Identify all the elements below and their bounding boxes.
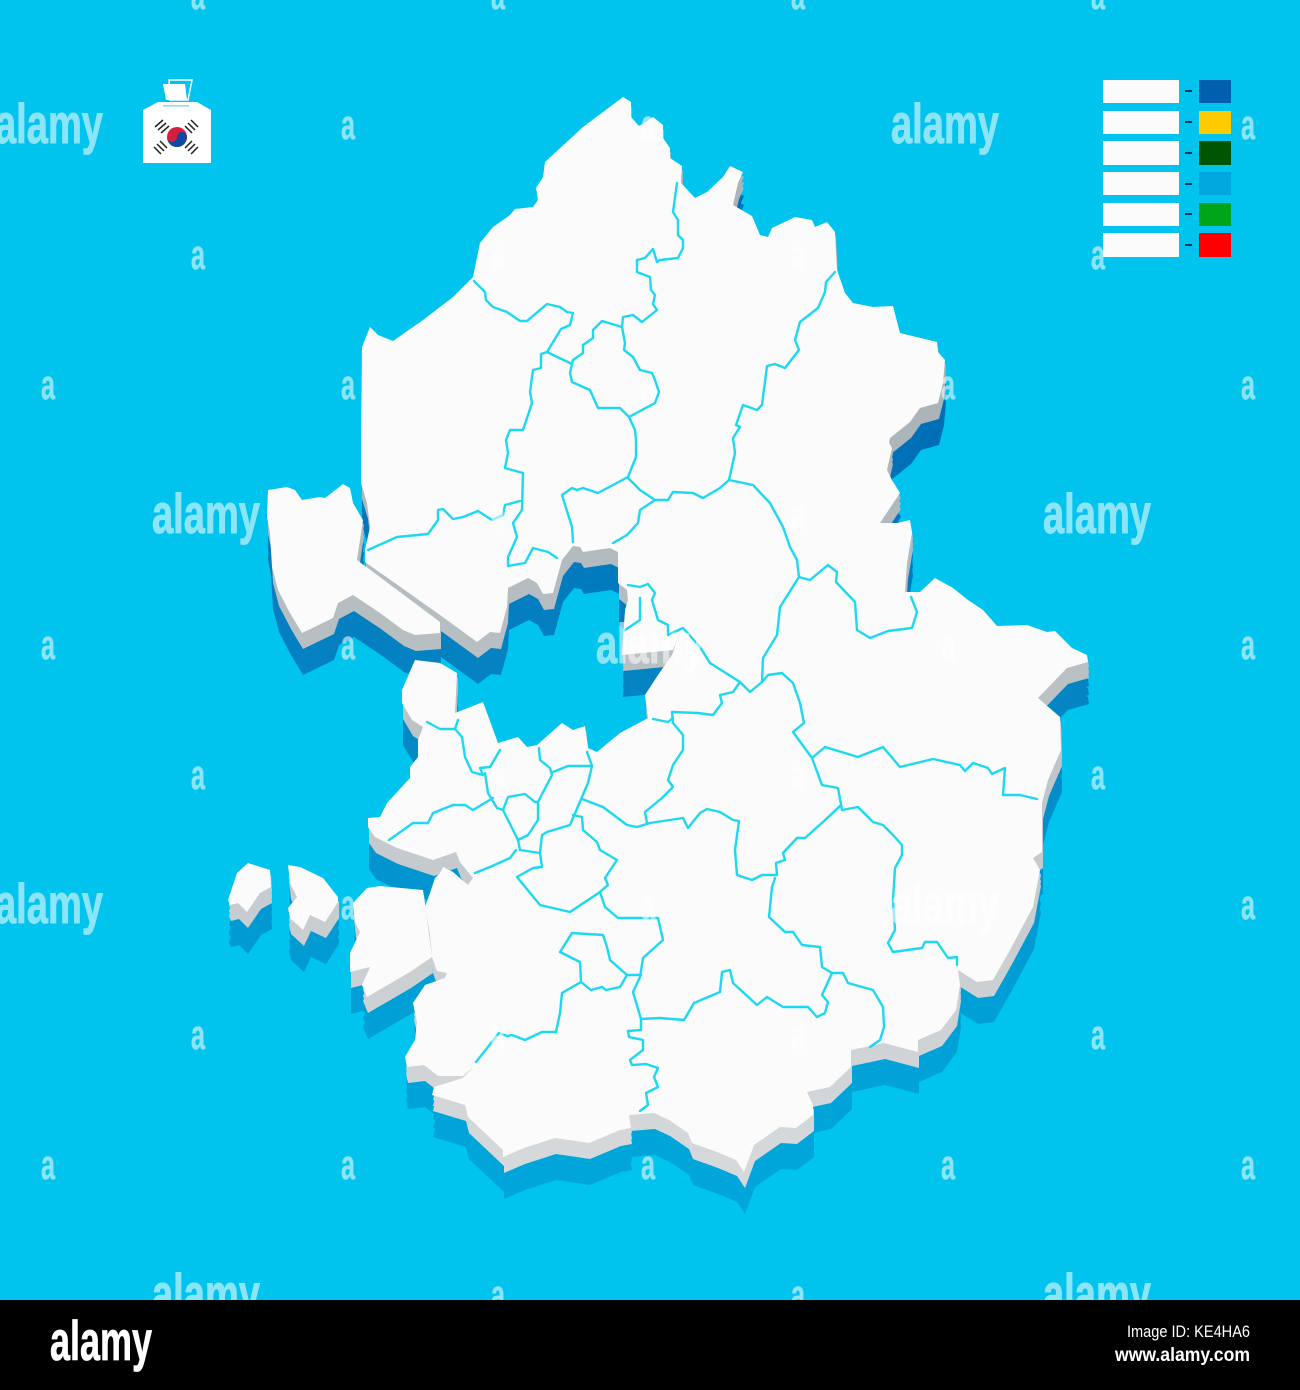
watermarks: a bbox=[491, 231, 505, 278]
watermarks: a bbox=[1241, 101, 1255, 148]
watermarks: a bbox=[41, 1141, 55, 1188]
watermarks: a bbox=[341, 621, 355, 668]
legend row 2 bbox=[1103, 111, 1231, 134]
watermarks: a bbox=[791, 1271, 805, 1318]
watermarks: a bbox=[791, 751, 805, 798]
watermarks: a bbox=[191, 231, 205, 278]
legend row 4 bbox=[1103, 172, 1231, 195]
legend row 1 bbox=[1103, 80, 1231, 103]
watermarks: a bbox=[1091, 1011, 1105, 1058]
watermarks: a bbox=[941, 361, 955, 408]
watermarks: a bbox=[641, 361, 655, 408]
watermarks: a bbox=[1241, 881, 1255, 928]
watermarks: a bbox=[491, 751, 505, 798]
map land surface bbox=[228, 97, 1088, 1172]
district boundaries bbox=[368, 183, 1037, 1111]
footer url: www.alamy.com bbox=[1114, 1345, 1250, 1366]
watermarks: a bbox=[791, 491, 805, 538]
watermarks: a bbox=[1091, 231, 1105, 278]
watermarks: a bbox=[341, 1141, 355, 1188]
watermarks: alamy bbox=[152, 1262, 260, 1325]
watermarks: a bbox=[941, 1141, 955, 1188]
icon: ballot box with flag bbox=[143, 80, 211, 163]
map shadow bbox=[229, 121, 1089, 1214]
watermarks: a bbox=[641, 1141, 655, 1188]
watermarks: a bbox=[341, 101, 355, 148]
watermarks: a bbox=[491, 1271, 505, 1318]
legend row 3 bbox=[1103, 141, 1231, 165]
watermarks: a bbox=[1091, 751, 1105, 798]
footer bar bbox=[0, 1300, 1300, 1390]
watermarks: a bbox=[41, 621, 55, 668]
watermarks: a bbox=[491, 491, 505, 538]
watermarks: a bbox=[1241, 1141, 1255, 1188]
legend row 6 bbox=[1103, 233, 1231, 257]
watermarks: alamy bbox=[891, 92, 999, 155]
watermarks: a bbox=[791, 231, 805, 278]
watermarks: a bbox=[191, 751, 205, 798]
watermarks: a bbox=[641, 881, 655, 928]
watermarks: a bbox=[791, 1011, 805, 1058]
watermarks: a bbox=[341, 361, 355, 408]
watermarks: a bbox=[941, 621, 955, 668]
watermarks: a bbox=[491, 1011, 505, 1058]
map extrusion bbox=[229, 102, 1089, 1188]
watermarks: alamy bbox=[1043, 482, 1151, 545]
watermarks: a bbox=[191, 1011, 205, 1058]
watermarks: a bbox=[1241, 361, 1255, 408]
watermarks: alamy bbox=[596, 612, 704, 675]
watermarks: a bbox=[341, 881, 355, 928]
footer logo: alamy bbox=[50, 1309, 152, 1372]
legend row 5 bbox=[1103, 203, 1231, 226]
footer image id: Image ID: KE4HA6 bbox=[1127, 1322, 1250, 1341]
watermarks: a bbox=[41, 361, 55, 408]
watermarks: alamy bbox=[891, 872, 999, 935]
legend bbox=[1103, 80, 1231, 257]
watermarks: alamy bbox=[1043, 1262, 1151, 1325]
watermarks: alamy bbox=[152, 482, 260, 545]
watermarks: a bbox=[641, 101, 655, 148]
watermarks: a bbox=[1241, 621, 1255, 668]
